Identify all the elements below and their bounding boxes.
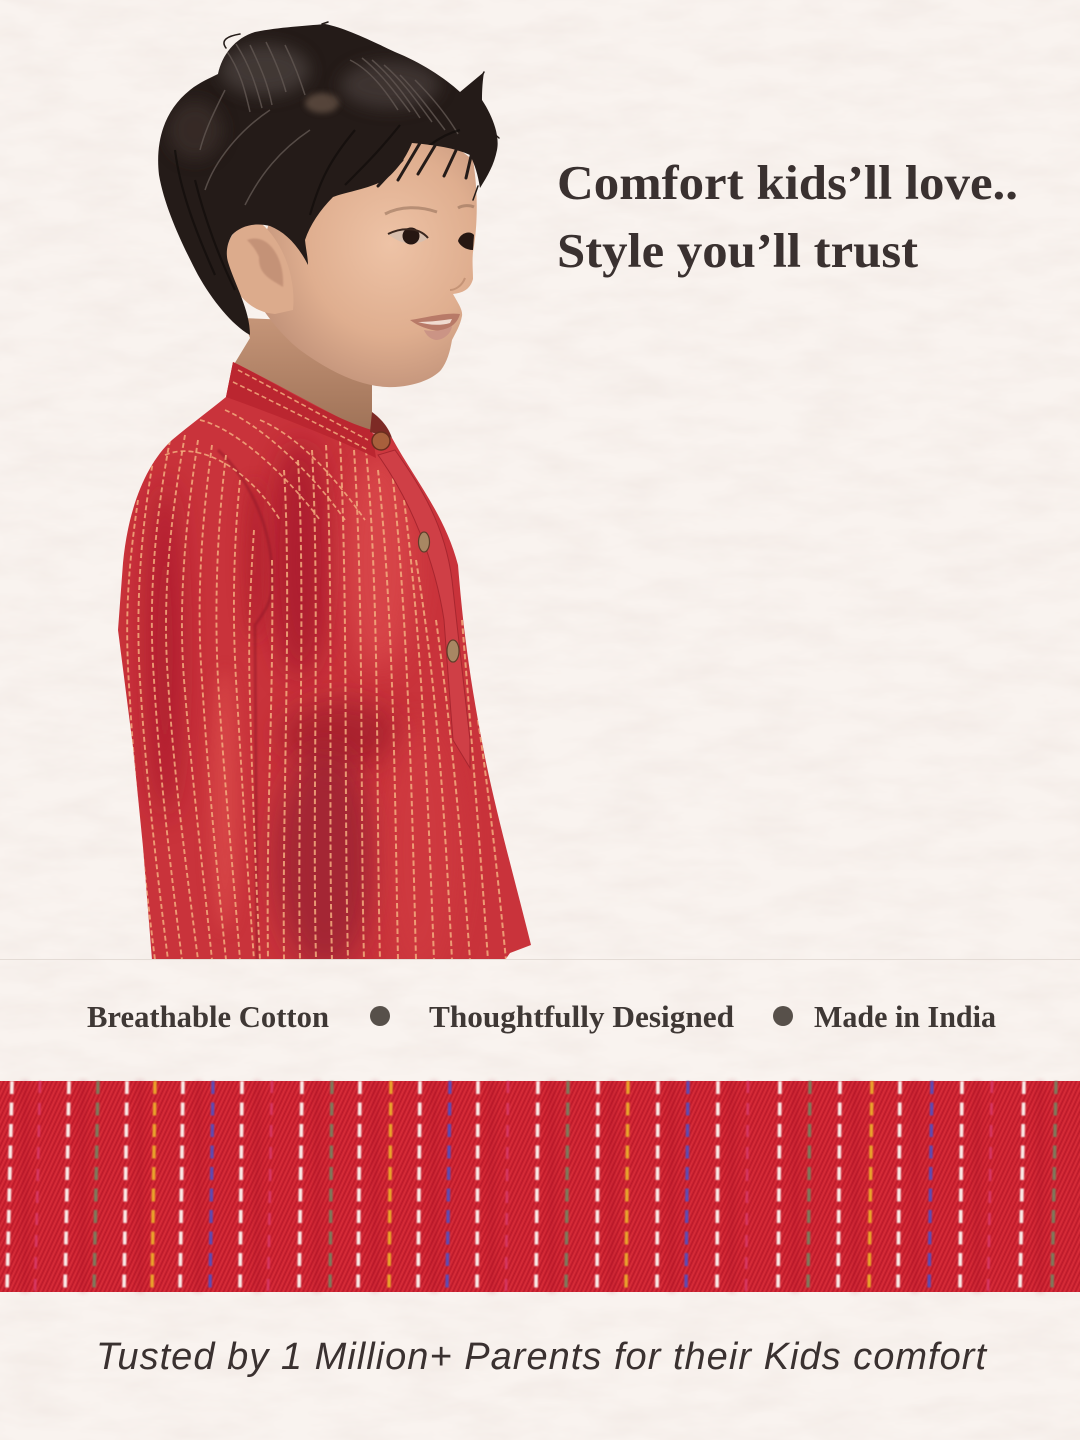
icon: boy's face — [250, 140, 477, 387]
heading: Comfort kids’ll love.. — [557, 155, 1018, 210]
hair — [158, 22, 499, 335]
buttons — [372, 432, 459, 662]
heading: Style you’ll trust — [557, 223, 919, 278]
smiling mouth — [410, 278, 465, 340]
heading — [557, 155, 1018, 278]
separator dot — [370, 1006, 390, 1026]
photo: boy in red kurta — [118, 22, 531, 980]
feature: thoughtfully designed: Thoughtfully Designed — [429, 999, 734, 1034]
fabric swatch strip — [0, 1081, 1080, 1292]
separator dot — [773, 1006, 793, 1026]
feature: breathable cotton: Breathable Cotton — [87, 999, 329, 1034]
feature: made in india: Made in India — [814, 999, 996, 1034]
kurta body and sleeve — [118, 362, 531, 980]
eyes and brows — [385, 206, 474, 250]
hair strands — [200, 42, 458, 205]
footer tagline: Tusted by 1 Million+ Parents for their Kids comfort — [96, 1336, 987, 1378]
body stitches — [268, 440, 506, 960]
neck — [233, 318, 372, 432]
features band — [0, 959, 1080, 1034]
placket — [378, 450, 470, 768]
fringe and flyaway strands — [224, 22, 499, 200]
scalp and sheen — [167, 44, 440, 160]
ear — [226, 223, 293, 314]
yoke stitches — [165, 410, 365, 520]
collar — [226, 362, 392, 458]
sleeve stitches — [127, 435, 260, 960]
fabric shading — [137, 437, 416, 959]
